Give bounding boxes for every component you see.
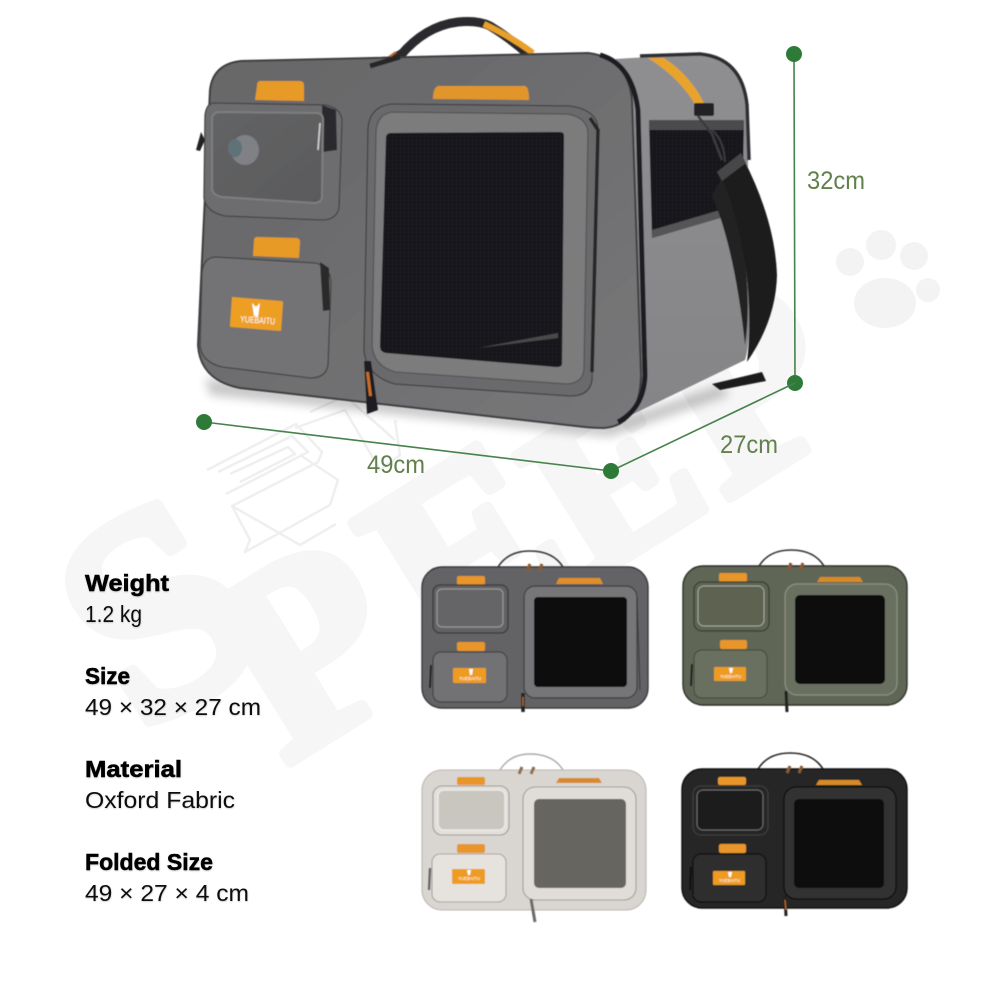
width dimension line	[196, 414, 619, 479]
brand label: YUEBAITU	[240, 314, 275, 326]
folded size value: 49 × 27 × 4 cm	[85, 880, 249, 906]
top yellow strip	[648, 58, 704, 106]
folded bag: black: YUEBAITU	[719, 878, 740, 883]
watermark paw	[836, 230, 940, 328]
watermark brand wordmark: E	[486, 336, 740, 621]
top buckle	[370, 57, 400, 66]
label logo	[252, 303, 260, 317]
height label: 32cm	[807, 167, 865, 195]
folded size heading: Folded Size	[85, 849, 213, 875]
watermark brand wordmark: P	[603, 220, 890, 548]
lower left tab	[253, 237, 300, 258]
main carrier bag photo	[196, 22, 777, 428]
clear window	[212, 112, 323, 203]
side mesh window	[649, 120, 744, 238]
side panel	[615, 54, 750, 418]
width label: 49cm	[367, 451, 425, 479]
material heading: Material	[85, 756, 182, 782]
height dimension line	[786, 46, 803, 391]
folded bag: olive green	[683, 550, 907, 712]
folded bag: grey	[422, 551, 648, 712]
watermark brand wordmark: S	[3, 431, 310, 788]
material value: Oxford Fabric	[85, 787, 235, 813]
watermark brand wordmark: E	[318, 382, 617, 718]
folded bag: off white	[422, 754, 646, 922]
front panel	[198, 53, 645, 428]
top centre tab	[433, 86, 529, 100]
watermark	[3, 220, 940, 814]
large mesh pocket	[364, 104, 598, 396]
weight heading: Weight	[85, 570, 169, 596]
watermark brand wordmark	[3, 220, 890, 814]
specifications list	[85, 570, 261, 906]
top left tab	[255, 81, 304, 101]
folded bag: grey: YUEBAITU	[459, 676, 481, 681]
size value: 49 × 32 × 27 cm	[85, 694, 261, 720]
depth label: 27cm	[720, 431, 778, 459]
depth dimension line	[611, 383, 795, 471]
folded bag: olive green: YUEBAITU	[720, 674, 741, 679]
shoulder strap	[694, 103, 777, 362]
side zipper pull	[196, 132, 205, 151]
watermark brand wordmark: P	[160, 480, 453, 814]
watermark maze logo	[207, 396, 400, 552]
front mesh panel	[380, 132, 564, 367]
front zipper pull	[364, 361, 378, 414]
weight value: 1.2 kg	[85, 601, 142, 627]
top window pocket	[196, 103, 342, 220]
folded bag: black	[682, 753, 907, 916]
folded bag: off white: YUEBAITU	[458, 876, 480, 881]
handle	[370, 22, 533, 70]
ground shadow	[205, 378, 730, 437]
bottom strap	[712, 372, 766, 390]
lower pocket	[200, 257, 331, 378]
size heading: Size	[85, 663, 130, 689]
